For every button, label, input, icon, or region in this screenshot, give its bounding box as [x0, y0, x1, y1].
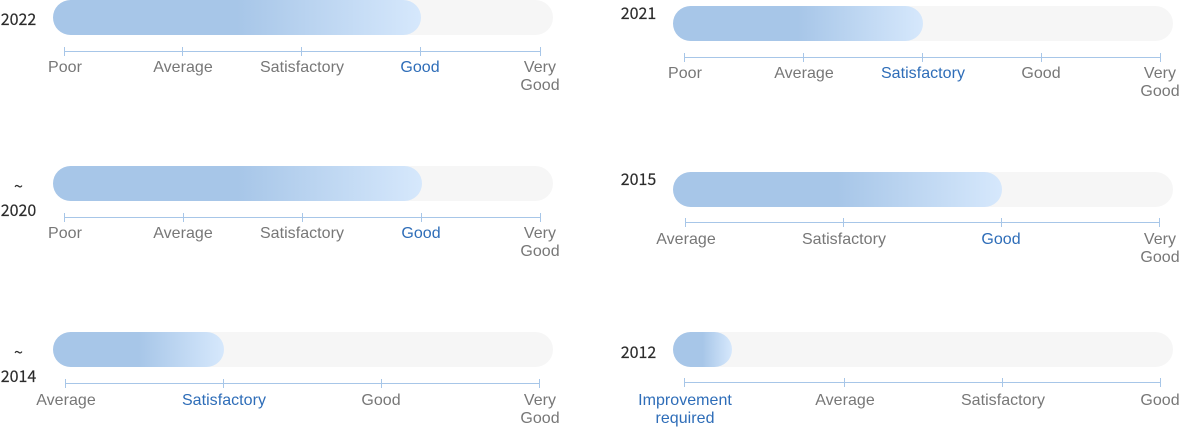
progress bar: up to 2014 [53, 332, 553, 367]
label: Good, selected: Good [981, 231, 1021, 248]
label: Very Good: Very [1144, 65, 1176, 82]
label: Poor: Poor [668, 65, 702, 82]
label: Good: Good [361, 392, 401, 409]
panel: up to 2020 rating [1, 166, 560, 260]
year label: 2021: 2021 [621, 0, 656, 24]
panel: 2022 rating [1, 0, 560, 94]
label: Satisfactory: Satisfactory [260, 225, 344, 242]
panel: 2015 rating [621, 166, 1180, 266]
scale axis [64, 213, 541, 222]
label: Very Good: Very [524, 225, 556, 242]
label: Improvement required, selected [638, 392, 732, 427]
label: Very Good [520, 59, 560, 94]
label: Good, selected: Good [401, 225, 441, 242]
label: Satisfactory: Satisfactory [802, 231, 886, 248]
year label: ~ 2014: ~ [14, 339, 23, 363]
panel: 2012 rating [621, 332, 1180, 427]
label: Poor: Poor [48, 225, 82, 242]
label: Very Good: Good [520, 410, 560, 427]
label: Good: Good [1140, 392, 1180, 409]
scale axis [684, 53, 1161, 62]
year label: ~ 2020: ~ [14, 173, 23, 197]
label: Very Good: Very [1144, 231, 1176, 248]
panel: up to 2014 rating [1, 332, 560, 427]
year label: ~ 2020 [1, 173, 36, 221]
label: Improvement required, selected: required [655, 410, 715, 427]
label: Average: Average [153, 225, 213, 242]
label: Very Good: Very [524, 59, 556, 76]
year label: 2022: 2022 [1, 6, 36, 30]
label: Satisfactory: Satisfactory [961, 392, 1045, 409]
label: Poor: Poor [48, 59, 82, 76]
year label: ~ 2014: 2014 [1, 363, 36, 387]
label: Satisfactory, selected: Satisfactory [881, 65, 965, 82]
panel: 2021 rating [621, 0, 1180, 100]
label: Good: Good [1021, 65, 1061, 82]
label: Very Good: Good [520, 243, 560, 260]
year label: ~ 2014 [1, 339, 36, 387]
scale axis [685, 218, 1160, 227]
year label: 2012: 2012 [621, 339, 656, 363]
label: Very Good [1140, 231, 1180, 266]
label: Satisfactory, selected: Satisfactory [182, 392, 266, 409]
label: Average: Average [815, 392, 875, 409]
label: Very Good: Good [1140, 249, 1180, 266]
scale axis [64, 47, 541, 56]
label: Average: Average [656, 231, 716, 248]
progress bar: up to 2020 [53, 166, 553, 201]
label: Very Good [1140, 65, 1180, 100]
label: Average: Average [36, 392, 96, 409]
label: Very Good: Very [524, 392, 556, 409]
label: Improvement required, selected: Improvement [638, 392, 732, 409]
label: Very Good: Good [1140, 83, 1180, 100]
label: Average: Average [153, 59, 213, 76]
progress bar: 2012 [673, 332, 1173, 367]
progress bar: 2015 [673, 172, 1173, 207]
progress bar: 2021 [673, 6, 1173, 41]
label: Very Good [520, 225, 560, 260]
label: Average: Average [774, 65, 834, 82]
label: Good, selected: Good [400, 59, 440, 76]
year label: ~ 2020: 2020 [1, 197, 36, 221]
label: Very Good: Good [520, 77, 560, 94]
progress bar: 2022 [53, 0, 553, 35]
label: Satisfactory: Satisfactory [260, 59, 344, 76]
scale axis [684, 378, 1161, 387]
label: Very Good [520, 392, 560, 427]
year label: 2015: 2015 [621, 166, 656, 190]
scale axis [65, 379, 540, 388]
